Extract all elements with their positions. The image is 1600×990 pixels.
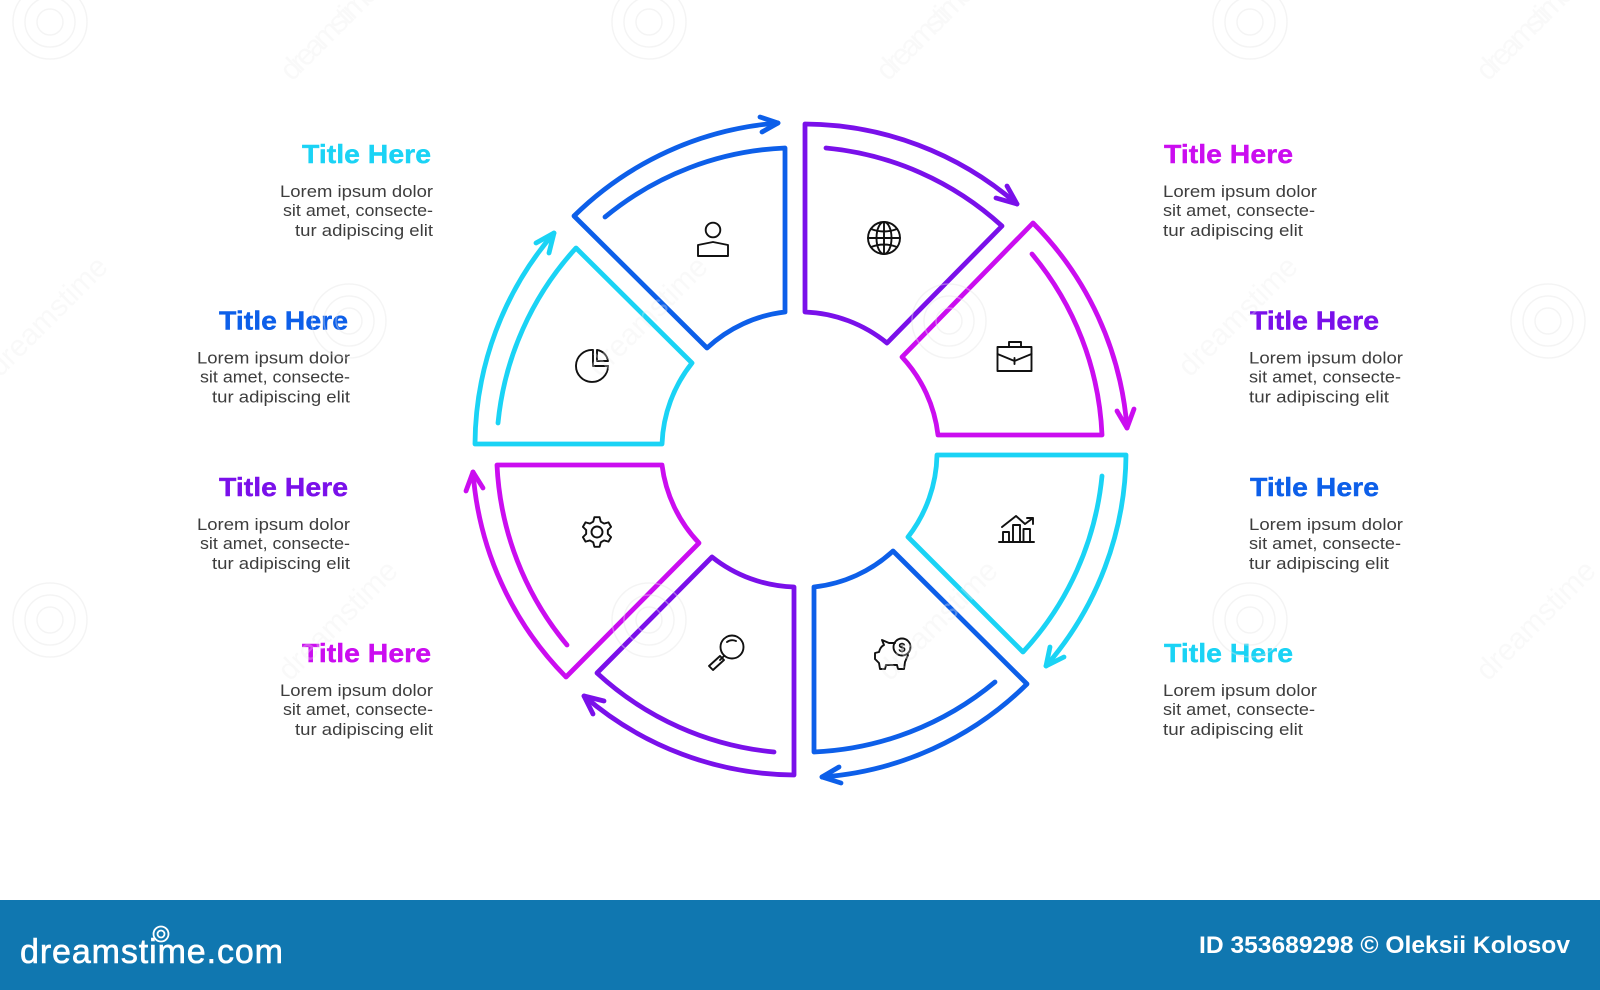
text block: left row 1: Title Here (302, 139, 431, 169)
icon: pie chart (576, 350, 608, 382)
text block: right row 1: sit amet, consecte- (1163, 201, 1315, 220)
text block: left row 1: sit amet, consecte- (283, 201, 433, 220)
icon: person (698, 223, 728, 256)
text block: right row 1: tur adipiscing elit (1163, 221, 1303, 240)
segment: magenta right with arrow (902, 223, 1134, 435)
text block: right row 3: tur adipiscing elit (1249, 554, 1389, 573)
text block: right row 4 (1163, 638, 1317, 739)
watermark pattern: dreamstime (272, 554, 405, 687)
icon: gear (583, 517, 611, 547)
segment: purple bottom-left with arrow (584, 557, 794, 775)
text block: left row 4: tur adipiscing elit (295, 720, 433, 739)
text block: left row 3: tur adipiscing elit (212, 554, 350, 573)
text block: right row 2: sit amet, consecte- (1249, 368, 1401, 386)
text block: right row 2: Lorem ipsum dolor (1249, 348, 1403, 368)
segment: cyan lower-right with arrow (908, 455, 1126, 666)
text block: left row 3: Title Here (219, 472, 348, 502)
icon: globe (868, 222, 900, 254)
text block: left row 2: Lorem ipsum dolor (197, 348, 350, 368)
watermark pattern: dreamstime (1470, 554, 1600, 687)
icon: piggy bank with coin (875, 638, 910, 669)
segment: blue bottom-right with arrow (814, 551, 1027, 783)
icon: bar chart with rising arrow (999, 516, 1034, 542)
footer logo text: dreamstime.com (20, 933, 283, 971)
text block: right row 3: Title Here (1250, 472, 1379, 502)
text block: left row 3 (197, 472, 350, 573)
text block: left row 2: Title Here (219, 306, 348, 336)
text block: left row 2: sit amet, consecte- (200, 368, 350, 386)
text block: right row 1: Lorem ipsum dolor (1163, 182, 1317, 201)
text block: right row 4: tur adipiscing elit (1163, 720, 1303, 739)
text block: left row 4: sit amet, consecte- (283, 700, 433, 719)
segment: magenta lower-left with arrow (466, 465, 699, 677)
text block: right row 4: sit amet, consecte- (1163, 700, 1315, 719)
icon: briefcase (998, 342, 1032, 371)
text block: right row 1: Title Here (1164, 139, 1293, 169)
text block: left row 4: Title Here (302, 638, 431, 668)
text block: left row 2 (197, 306, 350, 406)
text block: right row 3 (1249, 472, 1403, 573)
icon: footer logo spiral (154, 926, 168, 942)
footer credit: ID 353689298 © Oleksii Kolosov (1199, 932, 1571, 959)
segment: cyan left with arrow (475, 233, 692, 444)
segment: blue top-left with arrow (574, 117, 785, 348)
text block: left row 3: Lorem ipsum dolor (197, 515, 350, 534)
text block: right row 3: sit amet, consecte- (1249, 534, 1401, 553)
footer bar (0, 900, 1600, 990)
watermark pattern: dreamstime (872, 554, 1005, 687)
text block: right row 4: Title Here (1164, 638, 1293, 668)
segment: purple top-right with arrow (805, 124, 1017, 343)
watermark pattern (0, 0, 1600, 687)
text block: right row 2 (1249, 306, 1403, 406)
watermark pattern: dreamstime (582, 250, 715, 383)
text block: right row 1 (1163, 139, 1317, 240)
text block: right row 4: Lorem ipsum dolor (1163, 681, 1317, 700)
text block: right row 2: tur adipiscing elit (1249, 388, 1389, 406)
text block: left row 4 (280, 638, 433, 739)
text block: left row 1: tur adipiscing elit (295, 221, 433, 240)
icon: piggy bank with coin: $ (898, 640, 906, 655)
icon: magnifying glass (709, 636, 744, 670)
watermark pattern: dreamstime (1172, 250, 1305, 383)
text block: left row 1 (280, 139, 433, 240)
text block: right row 3: Lorem ipsum dolor (1249, 515, 1403, 534)
text block: right row 2: Title Here (1250, 306, 1379, 336)
text block: left row 4: Lorem ipsum dolor (280, 681, 433, 700)
text block: left row 2: tur adipiscing elit (212, 388, 350, 406)
text block: left row 1: Lorem ipsum dolor (280, 182, 433, 201)
text block: left row 3: sit amet, consecte- (200, 534, 350, 553)
